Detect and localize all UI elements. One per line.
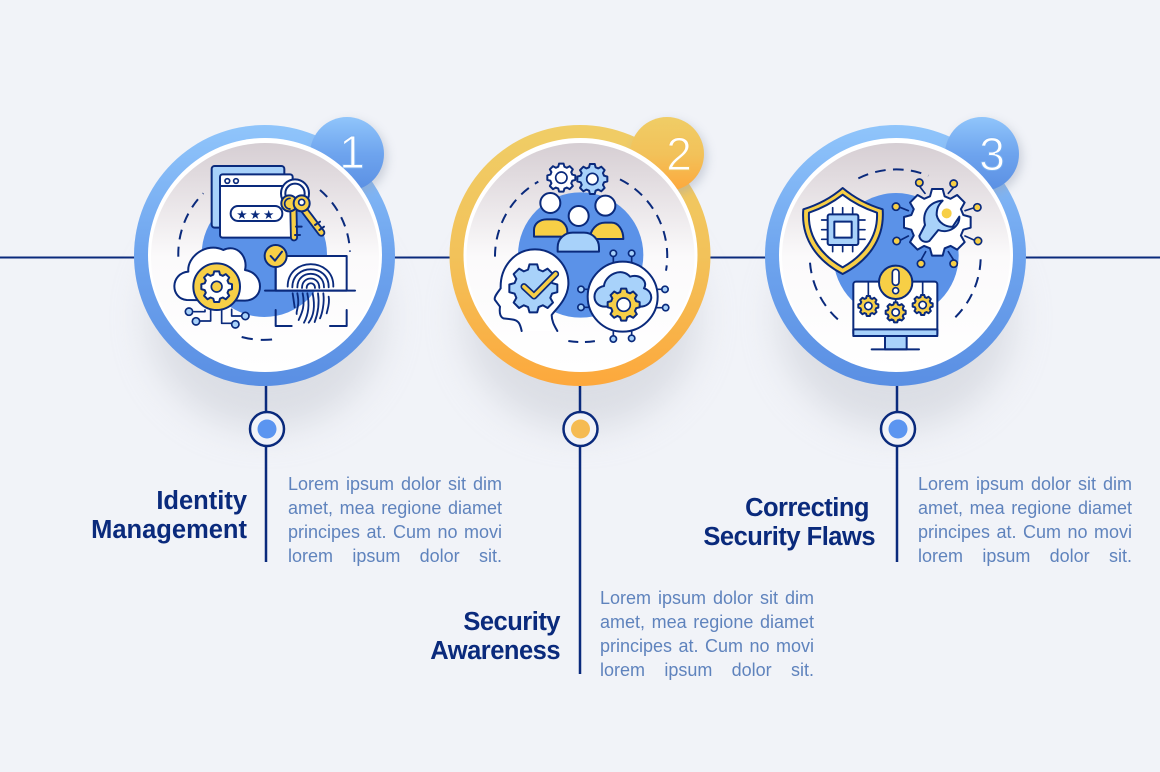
title: Security Awareness: Awareness [430,637,560,665]
title: Correcting Security Flaws: Correcting [745,494,869,522]
badge 3 [945,117,1022,195]
step 1 connector and node [148,206,384,562]
title: Correcting Security Flaws [703,494,875,551]
text block: step 2: amet, mea regione diamet [600,612,814,632]
text block: step 3: Lorem ipsum dolor sit dim [918,474,1132,494]
badge 2: 2 [666,128,692,180]
text block: step 1: Lorem ipsum dolor sit dim [288,474,502,494]
badge 1 [310,117,387,195]
text block: step 1: lorem ipsum dolor sit. [288,546,502,566]
title: Identity Management: Identity [156,487,247,515]
text block: step 2: Lorem ipsum dolor sit dim [600,588,814,608]
icon: correcting security flaws [803,169,982,349]
badge 2 [630,117,707,195]
badge 3: 3 [979,128,1005,180]
text block: step 2 [600,588,814,680]
step 1 circle [134,117,395,386]
title: Identity Management [91,487,247,544]
horizontal timeline [0,256,1160,258]
title: Security Awareness: Security [463,608,560,636]
text block: step 3: principes at. Cum no movi [918,522,1132,542]
step 3 circle [765,117,1026,386]
text block: step 3: lorem ipsum dolor sit. [918,546,1132,566]
text block: step 3: amet, mea regione diamet [918,498,1132,518]
icon: identity management [174,166,355,340]
title: Identity Management: Management [91,516,247,544]
text block: step 1: amet, mea regione diamet [288,498,502,518]
icon: security awareness [495,164,669,342]
title: Security Awareness [430,608,560,665]
text block: step 2: principes at. Cum no movi [600,636,814,656]
step 2 circle [450,117,710,386]
text block: step 1: principes at. Cum no movi [288,522,502,542]
badge 1: 1 [339,126,365,178]
title: Correcting Security Flaws: Security Flaws [703,523,875,551]
icon: identity management: ★★★ [236,207,276,222]
text block: step 2: lorem ipsum dolor sit. [600,660,814,680]
step 2 connector and node [463,206,699,674]
text block: step 1 [288,474,502,566]
step 3 connector and node [778,206,1014,562]
text block: step 3 [918,474,1132,566]
